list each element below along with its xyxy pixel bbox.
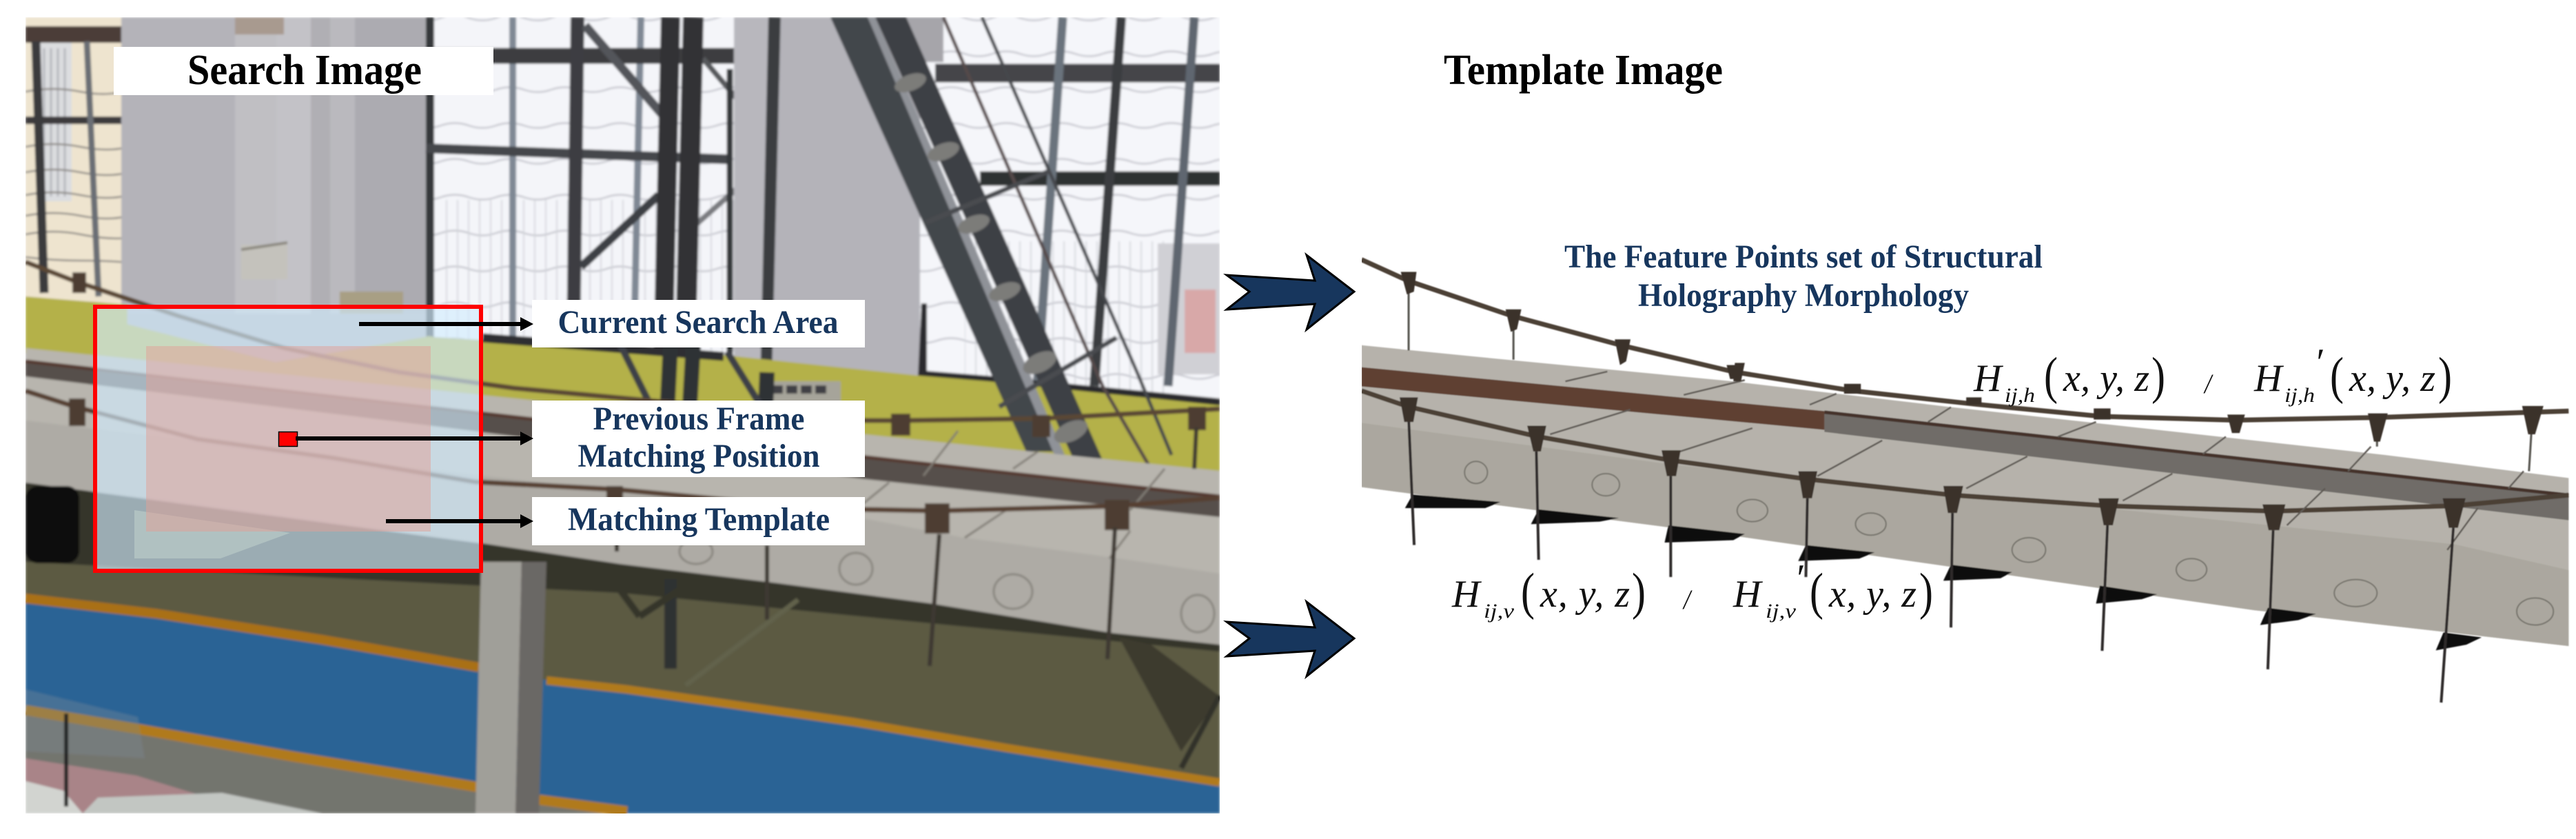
formula: horizontal feature points: ) (2438, 347, 2452, 405)
arrow: to current search area (359, 317, 533, 331)
formula: vertical feature points: ) (1919, 563, 1933, 620)
formula: vertical feature points: ij,v (1484, 600, 1515, 623)
formula: vertical feature points (1451, 557, 1933, 623)
matching regions overlay (95, 307, 481, 571)
formula: horizontal feature points: x, y, z (2063, 357, 2149, 400)
formula: horizontal feature points: ) (2151, 347, 2165, 405)
search image photo (25, 17, 1220, 813)
formula: horizontal feature points: ( (2330, 347, 2344, 405)
marker: previous frame position (278, 432, 298, 447)
formula: vertical feature points: H (1732, 573, 1763, 616)
formula: horizontal feature points: ( (2044, 347, 2058, 405)
label: previous frame matching position: Matching Position (577, 438, 820, 474)
formula: horizontal feature points: H (1973, 357, 2003, 400)
formula: vertical feature points: ) (1632, 563, 1646, 620)
label: previous frame matching position: Previous Frame (593, 401, 805, 437)
label: matching template (532, 497, 865, 545)
formula: horizontal feature points: x, y, z (2349, 357, 2435, 400)
template image: bridge (1362, 260, 2568, 702)
search image title: Search Image (187, 47, 422, 94)
current search area (95, 307, 481, 571)
label: previous frame matching position (532, 401, 865, 477)
arrow: to previous frame label (296, 432, 533, 445)
formula: horizontal feature points: ij,h (2005, 384, 2035, 407)
formula: vertical feature points: ( (1521, 563, 1535, 620)
formula: vertical feature points: x, y, z (1828, 573, 1916, 616)
formula: horizontal feature points: H (2253, 357, 2284, 400)
formula: vertical feature points: ij,v (1766, 600, 1797, 623)
feature points caption: The Feature Points set of Structural (1564, 239, 2043, 275)
formula: vertical feature points: ( (1810, 563, 1823, 620)
formula: horizontal feature points: / (2203, 368, 2214, 399)
template image title: Template Image (1444, 47, 1723, 94)
formula: vertical feature points: x, y, z (1540, 573, 1630, 616)
label: current search area: Current Search Area (558, 304, 838, 341)
formula: horizontal feature points: ′ (2314, 341, 2323, 384)
feature points caption (1564, 239, 2043, 314)
formula: horizontal feature points (1973, 341, 2452, 407)
label: matching template: Matching Template (568, 501, 830, 538)
feature points caption: Holography Morphology (1638, 277, 1969, 314)
arrow: lower block arrow (1227, 602, 1354, 676)
formula: vertical feature points: / (1682, 584, 1693, 615)
search image title (114, 47, 493, 95)
label: current search area (532, 300, 865, 347)
formula: horizontal feature points: ij,h (2284, 384, 2315, 407)
arrow: upper block arrow (1227, 255, 1354, 330)
formula: vertical feature points: H (1451, 573, 1482, 616)
matching template area (146, 346, 431, 532)
formula: vertical feature points: ′ (1795, 557, 1803, 600)
arrow: to matching template label (386, 514, 533, 528)
